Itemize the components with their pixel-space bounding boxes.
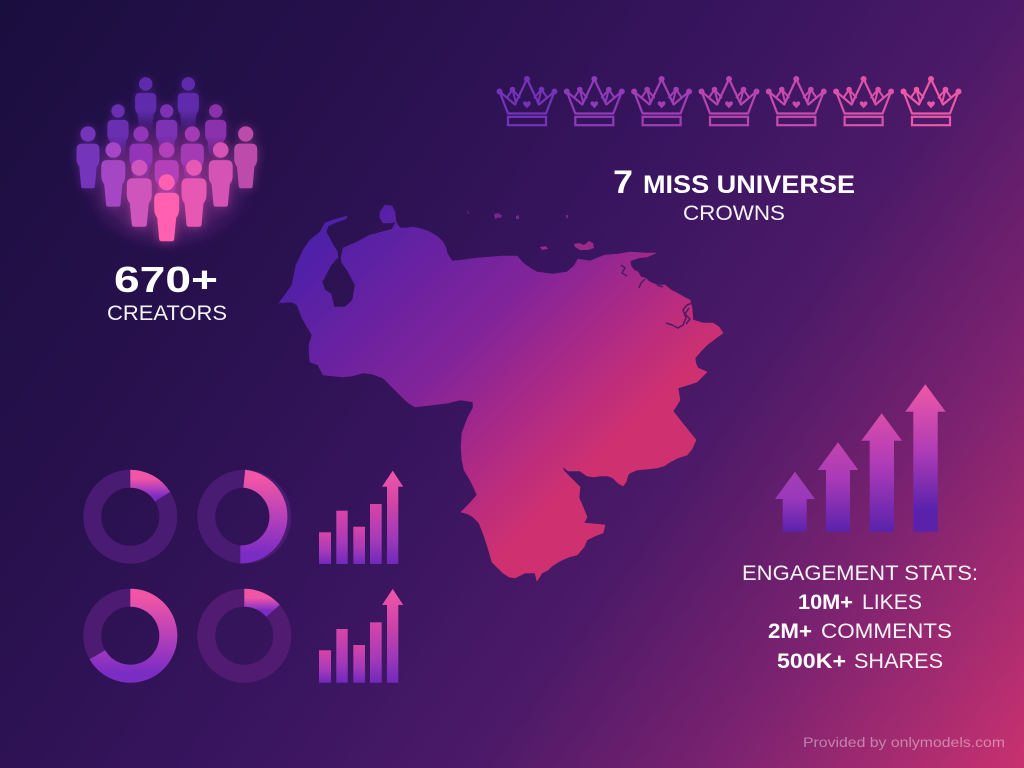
donut chart 3 xyxy=(92,598,168,674)
bar chart 2 with arrow xyxy=(319,589,403,683)
donut chart 4 xyxy=(206,598,282,674)
stat: creators: 670+ xyxy=(114,259,218,300)
glow xyxy=(79,117,255,253)
stat: Miss Universe crowns: 7 xyxy=(613,164,633,200)
stats: engagement: SHARES xyxy=(854,650,943,673)
icon: four rising arrows xyxy=(775,384,946,532)
donut chart 1 xyxy=(92,479,168,555)
stat: Miss Universe crowns xyxy=(613,164,855,225)
person row 2 xyxy=(107,104,226,161)
stats: engagement: 10M+ xyxy=(798,591,853,614)
stats: engagement: ENGAGEMENT STATS: xyxy=(742,562,978,585)
bar chart 1 with arrow xyxy=(319,471,403,564)
stat: creators xyxy=(107,259,227,325)
delta and gulf cuts xyxy=(621,265,692,328)
person row 4 xyxy=(101,142,233,207)
credit line: Provided by onlymodels.com xyxy=(803,734,1005,750)
stat: Miss Universe crowns: CROWNS xyxy=(683,202,785,225)
person row 1 xyxy=(135,77,199,134)
stats: engagement xyxy=(742,562,978,673)
stat: creators: CREATORS xyxy=(107,302,227,325)
stats: engagement: COMMENTS xyxy=(821,620,952,643)
person front xyxy=(154,174,179,241)
person row 3 xyxy=(76,126,257,188)
donut chart 2 xyxy=(206,479,282,555)
icon row: seven crowns xyxy=(496,76,962,125)
person row 5 xyxy=(127,160,206,227)
stats: engagement: 500K+ xyxy=(777,650,846,673)
stats: engagement: 2M+ xyxy=(768,620,812,643)
islands xyxy=(574,241,594,250)
icon: crowd of creators xyxy=(76,77,257,253)
stats: engagement: LIKES xyxy=(862,591,922,614)
stat: Miss Universe crowns: MISS UNIVERSE xyxy=(643,171,855,199)
map: Venezuela silhouette xyxy=(279,205,723,581)
